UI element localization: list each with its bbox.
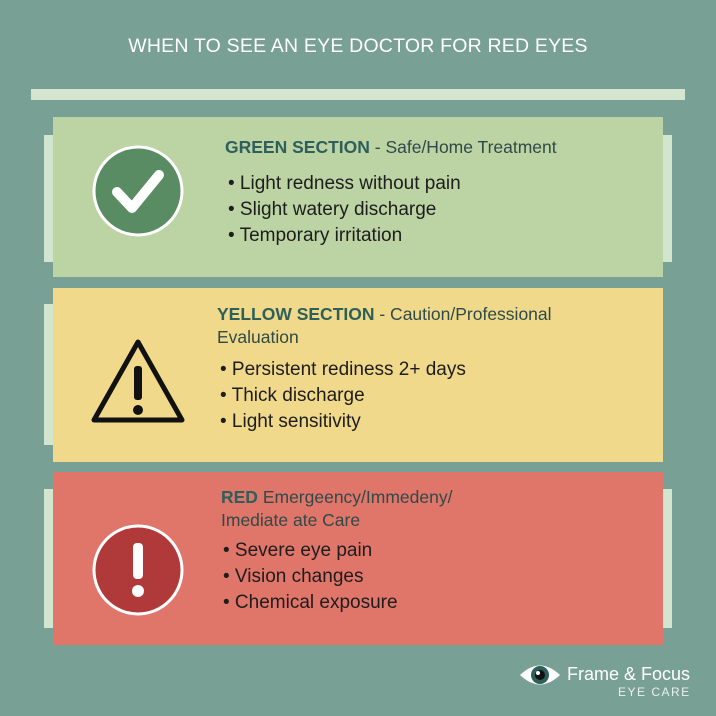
bullets: red: • Chemical exposure [223,592,398,613]
heading: yellow: YELLOW SECTION - Caution/Professional [217,304,552,324]
bullets: yellow [220,359,466,432]
title: WHEN TO SEE AN EYE DOCTOR FOR RED EYES [128,35,588,57]
heading: yellow: Evaluation [217,327,299,347]
bullets: red [223,540,398,613]
heading: red: Imediate ate Care [221,510,360,530]
heading: green: GREEN SECTION - Safe/Home Treatment [225,137,557,157]
bullets: green: • Slight watery discharge [228,199,436,220]
heading: yellow [217,304,552,347]
header bar [31,89,685,100]
heading: red [221,487,452,530]
bullets: yellow: • Persistent rediness 2+ days [220,359,466,380]
panel: yellow [53,288,663,462]
icon: exclamation [92,524,184,616]
icon: eye [520,666,560,684]
panel: red [53,472,663,645]
bullets: green: • Temporary irritation [228,225,402,246]
panel: green [53,117,663,277]
icon: check [92,146,184,236]
icon: warning [92,340,184,422]
bullets: green [228,173,461,246]
bullets: yellow: • Thick discharge [220,385,365,406]
bullets: red: • Severe eye pain [223,540,372,561]
bullets: green: • Light redness without pain [228,173,461,194]
logo: EYE CARE [618,685,691,699]
bullets: red: • Vision changes [223,566,363,587]
heading: red: RED Emergeency/Immedeny/ [221,487,452,507]
logo: Frame & Focus [567,664,690,684]
logo [520,664,691,699]
bullets: yellow: • Light sensitivity [220,411,361,432]
